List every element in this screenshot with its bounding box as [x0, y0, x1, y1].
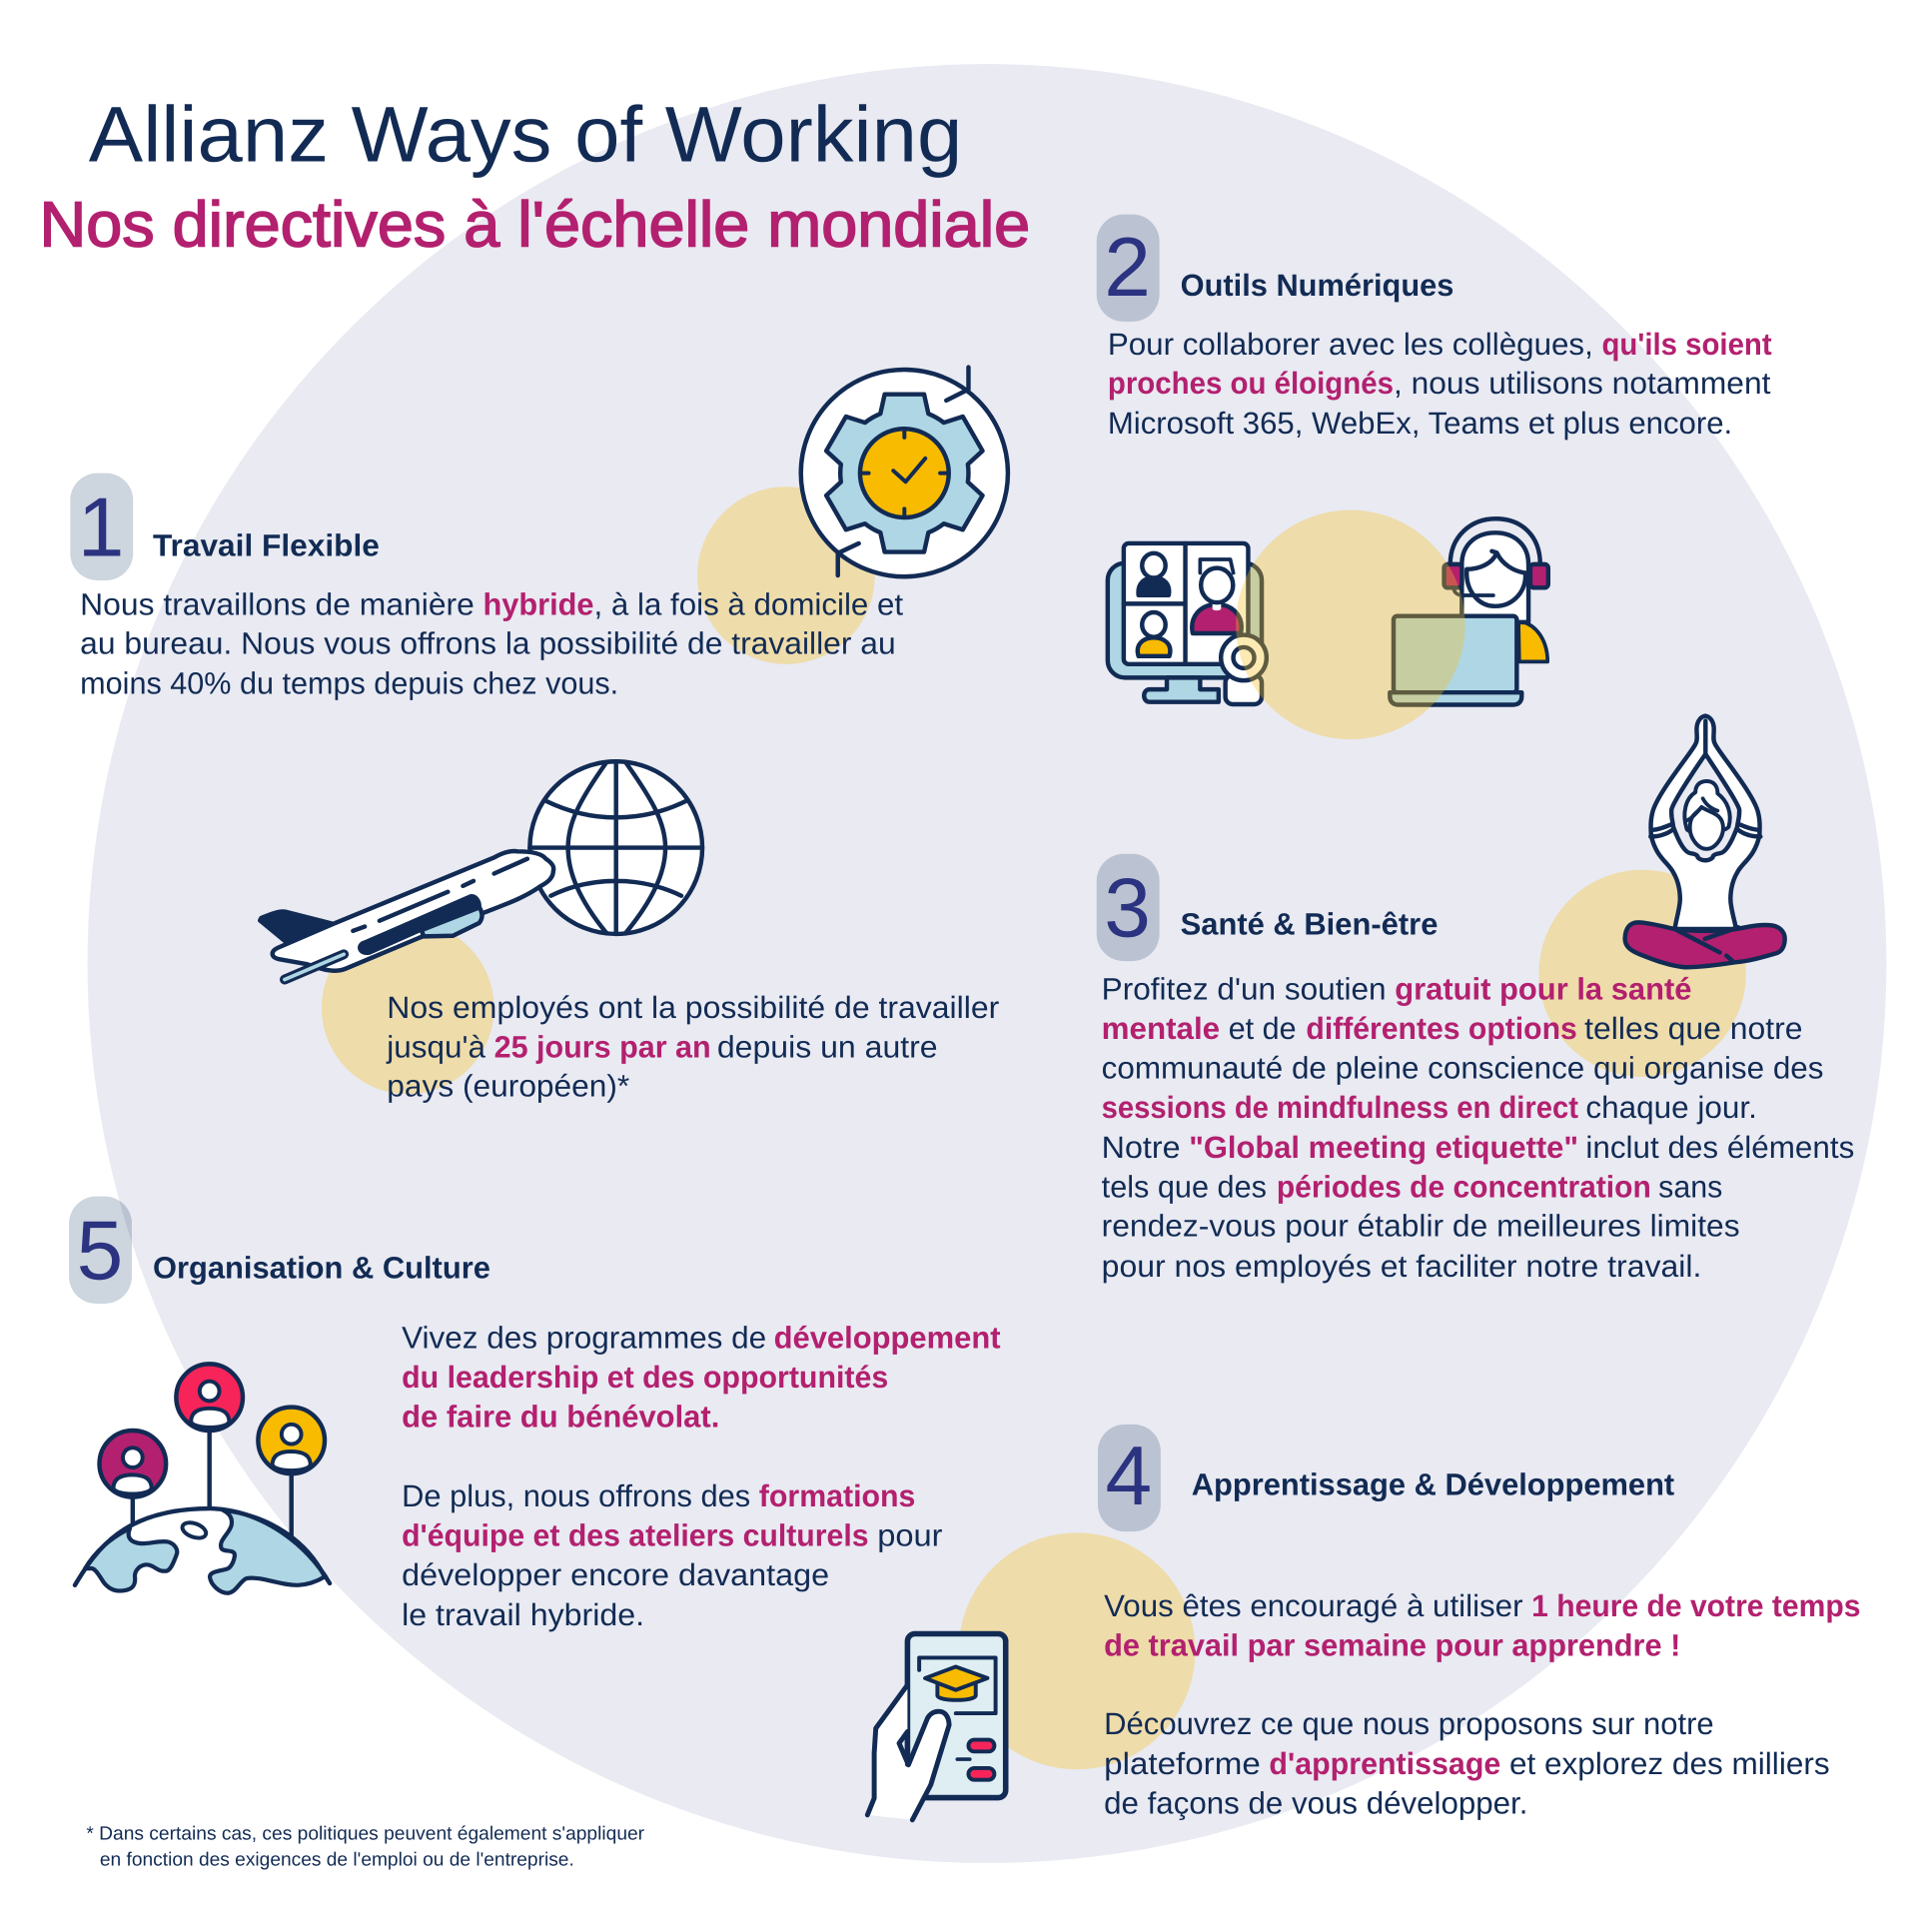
text block: section 2: , nous utilisons notamment [1394, 367, 1770, 401]
text block: section 3: gratuit pour la santé [1395, 973, 1692, 1007]
text block: section 2: Pour collaborer avec les collègues, [1108, 328, 1593, 363]
icon: airplane [260, 851, 553, 980]
text block: section 4 [1104, 1589, 1860, 1821]
heading: Santé & Bien-être: Santé & Bien-être [1181, 907, 1439, 942]
heading: Outils Numériques: Outils Numériques [1181, 269, 1453, 303]
text block: section 5: d'équipe et des ateliers culturels [402, 1518, 869, 1553]
heading: Apprentissage & Développement: Apprentissage & Développement [1192, 1467, 1675, 1502]
text block: section 3: périodes de concentration [1277, 1170, 1651, 1205]
text block: section 5: Vivez des programmes de [402, 1322, 766, 1356]
text block: section 1: hybride [483, 587, 594, 622]
text block: section 3: sans [1658, 1170, 1722, 1205]
yellow circle: section 3 [1539, 870, 1746, 1077]
text block: section 3: Notre [1102, 1131, 1181, 1165]
text block: section 3: sessions de mindfulness en direct [1102, 1091, 1579, 1125]
text block: section 4: d'apprentissage [1269, 1747, 1500, 1782]
text block: section 2: proches ou éloignés [1108, 367, 1394, 401]
icon: video call monitor [1108, 543, 1267, 704]
text block: 25 days abroad: jusqu'à [386, 1030, 485, 1065]
subtitle: Nos directives à l'échelle mondiale [39, 190, 1030, 261]
text block: section 2: qu'ils soient [1601, 328, 1772, 363]
text block: section 5: du leadership et des opportunités [402, 1361, 888, 1396]
text block: section 4: de travail par semaine pour apprendre ! [1104, 1629, 1680, 1663]
text block: section 2 [1108, 328, 1772, 442]
text block: section 4: Découvrez ce que nous proposons sur notre [1104, 1707, 1714, 1741]
text block: section 3: inclut des éléments [1585, 1131, 1854, 1165]
icon: person with headset and laptop [1390, 518, 1548, 705]
text block: section 5: le travail hybride. [402, 1598, 644, 1632]
text block: section 5: pour [877, 1518, 943, 1553]
text block: section 5: De plus, nous offrons des [402, 1479, 750, 1514]
text block: section 3: et de [1229, 1012, 1297, 1047]
badge 5: 5 [77, 1204, 123, 1298]
text block: section 4: Vous êtes encouragé à utiliser [1104, 1589, 1523, 1624]
badge 3: 3 [1104, 861, 1151, 955]
badge 2 [1097, 215, 1160, 322]
text block: section 3: mentale [1102, 1012, 1220, 1047]
text block: section 3: chaque jour. [1585, 1091, 1757, 1125]
heading: Travail Flexible: Travail Flexible [153, 528, 380, 563]
text block: section 4: et explorez des milliers [1509, 1747, 1830, 1782]
text block: section 5: développer encore davantage [402, 1558, 829, 1592]
text block: 25 days abroad [386, 991, 999, 1104]
text block: section 4: plateforme [1104, 1747, 1261, 1782]
yellow circle: section 1 [697, 486, 875, 664]
footnote: * Dans certains cas, ces politiques peuvent également s'appliquer [86, 1823, 644, 1844]
text block: section 5: développement [774, 1322, 1001, 1356]
text block: 25 days abroad: depuis un autre [717, 1030, 938, 1065]
text block: section 3: communauté de pleine conscience qui organise des [1102, 1051, 1823, 1086]
badge 2: 2 [1104, 221, 1151, 315]
text block: section 3: rendez-vous pour établir de meilleures limites [1102, 1210, 1740, 1244]
footnote [86, 1823, 644, 1870]
badge 3 [1097, 854, 1160, 961]
text block: section 3 [1102, 973, 1854, 1284]
badge 1: 1 [78, 481, 124, 574]
footnote: en fonction des exigences de l'emploi ou de l'entreprise. [100, 1849, 574, 1870]
badge 4 [1098, 1425, 1161, 1531]
yellow circle: section 4 [959, 1532, 1195, 1769]
badge 1 [70, 474, 133, 580]
text block: section 4: 1 heure de votre temps [1531, 1589, 1860, 1624]
text block: 25 days abroad: 25 jours par an [494, 1030, 711, 1065]
text block: section 1: , à la fois à domicile et [594, 587, 903, 622]
text block: section 1: au bureau. Nous vous offrons la possibilité de travailler au [80, 626, 896, 661]
text block: section 3: différentes options [1306, 1012, 1577, 1047]
text block: section 1 [80, 587, 903, 701]
text block: section 3: telles que notre [1584, 1012, 1802, 1047]
text block: section 3: tels que des [1102, 1170, 1267, 1205]
yellow circle: section 2 overlay [1236, 510, 1465, 739]
icon: yoga figure [1625, 716, 1785, 967]
text block: section 5 [402, 1322, 1001, 1632]
text block: section 3: pour nos employés et faciliter notre travail. [1102, 1250, 1701, 1284]
text block: 25 days abroad: pays (européen)* [387, 1070, 630, 1104]
text block: section 1: moins 40% du temps depuis chez vous. [80, 666, 618, 701]
icon: gear and clock [801, 368, 1008, 576]
heading: Organisation & Culture: Organisation & Culture [153, 1252, 490, 1286]
text block: section 1: Nous travaillons de manière [80, 587, 475, 622]
text block: section 3: "Global meeting etiquette" [1189, 1131, 1578, 1165]
icon: globe with people pins [75, 1364, 330, 1593]
text block: section 2: Microsoft 365, WebEx, Teams et plus encore. [1108, 407, 1732, 442]
badge 4: 4 [1105, 1430, 1152, 1523]
text block: section 3: Profitez d'un soutien [1102, 973, 1387, 1007]
yellow circle: plane [322, 922, 494, 1094]
text block: section 4: de façons de vous développer. [1104, 1786, 1527, 1821]
text block: section 5: formations [759, 1479, 915, 1514]
title: Allianz Ways of Working [89, 90, 962, 179]
badge 5 [69, 1197, 132, 1304]
text block: 25 days abroad: Nos employés ont la possibilité de travailler [387, 991, 999, 1025]
icon: globe [529, 761, 702, 934]
text block: section 5: de faire du bénévolat. [402, 1401, 719, 1435]
icon: hand holding phone [867, 1634, 1006, 1820]
